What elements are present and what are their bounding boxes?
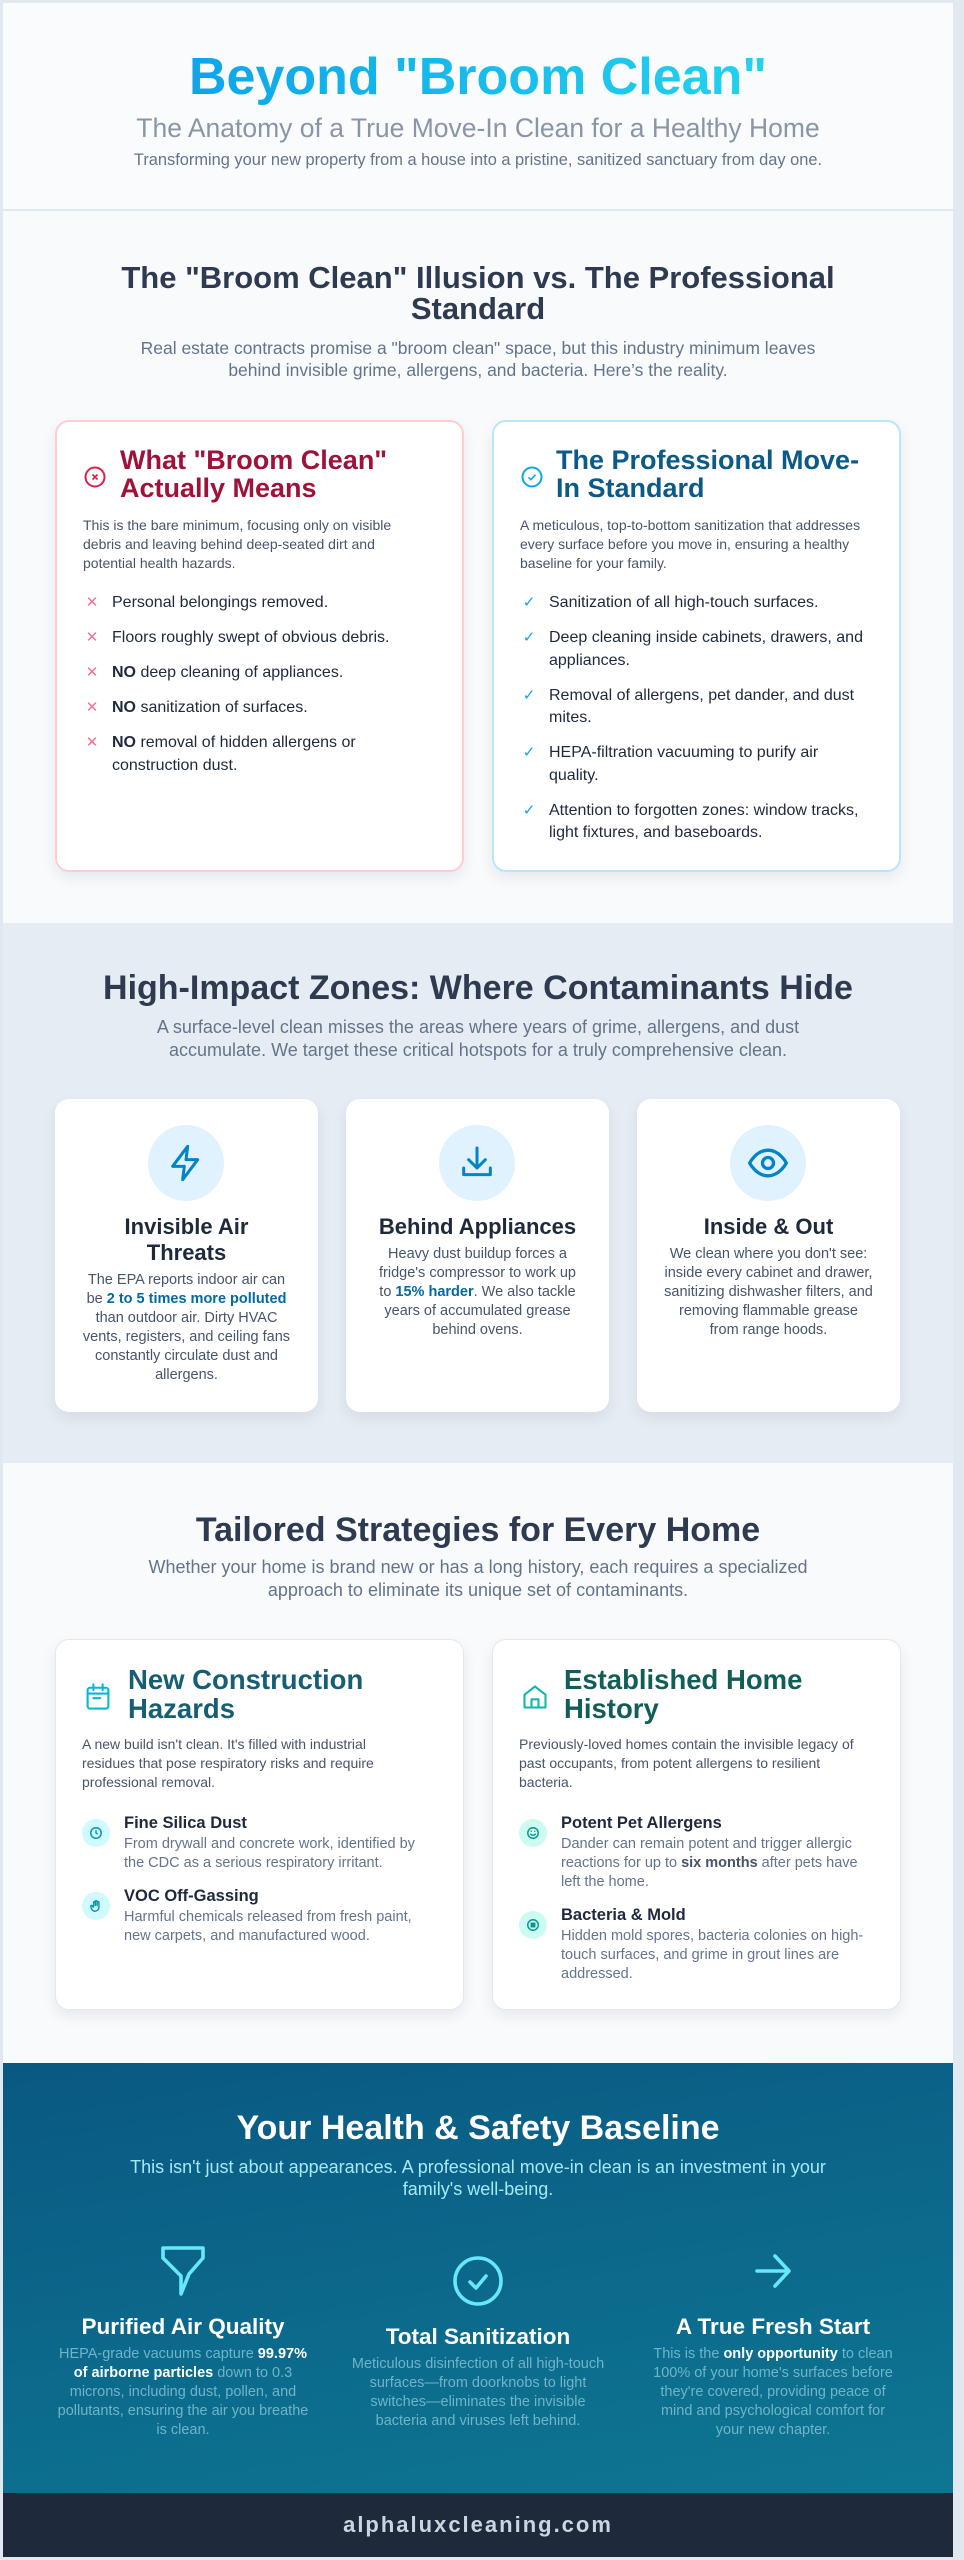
list: professional items: Removal of allergens, pet dander, and dust	[549, 686, 854, 704]
intro text: Whether your home is brand new or has a long history, each requires a specialized	[148, 1556, 808, 1576]
heading: High-Impact Zones: Where Contaminants Hide	[103, 969, 853, 1007]
item: silica dust: Fine Silica Dust	[124, 1814, 247, 1832]
icon: x circle	[84, 466, 106, 488]
list: professional items: Sanitization of all high-touch surfaces.	[549, 594, 818, 611]
footer	[3, 2493, 953, 2557]
list: professional items: appliances.	[549, 652, 630, 668]
intro text	[130, 2157, 826, 2199]
card title	[128, 1664, 363, 1724]
column: total sanitization	[352, 2256, 604, 2428]
card: invisible air threats: The EPA reports indoor air can	[88, 1272, 285, 1288]
list: broom clean items: NO sanitization of surfaces.	[112, 699, 308, 716]
card: inside & out	[637, 1099, 900, 1412]
footer url: alphaluxcleaning.com	[343, 2512, 613, 2537]
list: broom clean items: ✕	[86, 699, 98, 716]
card: invisible air threats: constantly circulate dust and	[95, 1348, 278, 1364]
card description: This is the bare minimum, focusing only on visible	[83, 517, 391, 533]
list: professional items: ✓	[523, 686, 535, 704]
card description	[519, 1736, 854, 1790]
card description: baseline for your family.	[520, 555, 667, 571]
column: fresh start: mind and psychological comfort for	[661, 2402, 885, 2418]
item: silica dust: the CDC as a serious respiratory irritant.	[124, 1854, 383, 1870]
item: VOC	[82, 1887, 412, 1944]
heading: Your Health & Safety Baseline	[236, 2109, 720, 2147]
column: total sanitization: bacteria and viruses left behind.	[376, 2412, 580, 2428]
list: broom clean items: NO removal of hidden allergens or	[112, 734, 356, 751]
card: invisible air threats: allergens.	[155, 1366, 218, 1382]
column: purified air: microns, including dust, pollen, and	[70, 2384, 296, 2400]
panel: new construction	[55, 1639, 464, 2010]
card title: In Standard	[556, 473, 705, 503]
card: invisible air threats: than outdoor air. Dirty HVAC	[96, 1310, 277, 1326]
item: VOC: Harmful chemicals released from fresh paint,	[124, 1908, 412, 1924]
list: professional items: ✓	[523, 744, 535, 761]
column: purified air: is clean.	[156, 2422, 210, 2438]
card: behind appliances: years of accumulated grease	[384, 1302, 571, 1318]
item: bacteria & mold	[519, 1906, 863, 1982]
card title: New Construction	[128, 1664, 363, 1695]
section: health & safety baseline	[3, 2063, 953, 2493]
column: total sanitization: surfaces—from doorknobs to light	[370, 2374, 586, 2390]
card description: past occupants, from potent allergens to resilient	[519, 1755, 820, 1771]
card title: Hazards	[128, 1693, 235, 1724]
heading	[121, 260, 835, 326]
card: inside & out: from range hoods.	[710, 1322, 827, 1338]
list: professional items: Attention to forgotten zones: window tracks,	[549, 802, 858, 818]
item: pet allergens: Potent Pet Allergens	[561, 1814, 722, 1832]
card description: professional removal.	[82, 1774, 215, 1790]
column: purified air: of airborne particles down to 0.3	[74, 2364, 292, 2380]
item: pet allergens: left the home.	[561, 1874, 649, 1890]
card: behind appliances: to 15% harder. We also tackle	[379, 1284, 576, 1300]
intro text: Real estate contracts promise a "broom clean" space, but this industry minimum leaves	[141, 338, 815, 358]
item: VOC: new carpets, and manufactured wood.	[124, 1928, 370, 1944]
item: bacteria & mold: Hidden mold spores, bacteria colonies on high-	[561, 1928, 863, 1944]
icon: calendar	[86, 1683, 110, 1710]
card title	[120, 445, 387, 503]
list: professional items: Deep cleaning inside cabinets, drawers, and	[549, 629, 863, 646]
card: invisible air threats: vents, registers, and ceiling fans	[83, 1328, 290, 1344]
card title	[556, 445, 859, 503]
list: broom clean items: Personal belongings removed.	[112, 594, 328, 611]
hazard list	[82, 1814, 415, 1944]
intro text: This isn't just about appearances. A professional move-in clean is an investment in your	[130, 2157, 826, 2177]
column: fresh start: they're covered, providing peace of	[660, 2384, 886, 2400]
card: inside & out: inside every cabinet and drawer,	[665, 1264, 872, 1280]
card title: What "Broom Clean"	[120, 445, 387, 475]
card description	[82, 1736, 374, 1790]
icon: filter	[161, 2246, 205, 2296]
list: professional items: ✓	[523, 629, 535, 646]
list: professional items: mites.	[549, 709, 592, 726]
card: inside & out: removing flammable grease	[679, 1302, 858, 1318]
card description: every surface before you move in, ensuring a healthy	[520, 536, 849, 552]
intro text: A surface-level clean misses the areas where years of grime, allergens, and dust	[157, 1016, 799, 1036]
card: behind appliances	[346, 1099, 609, 1412]
icon: check circle	[522, 466, 542, 488]
list: broom clean items: ✕	[86, 734, 98, 751]
intro text: behind invisible grime, allergens, and bacteria. Here’s the reality.	[228, 360, 728, 380]
card title: History	[564, 1693, 659, 1724]
card description: Previously-loved homes contain the invisible legacy of	[519, 1736, 854, 1752]
item: silica dust: From drywall and concrete work, identified by	[124, 1836, 415, 1852]
card title: The Professional Move-	[556, 445, 859, 475]
list: broom clean items: NO deep cleaning of appliances.	[112, 664, 343, 681]
icon: check circle	[453, 2256, 503, 2306]
intro text	[157, 1016, 799, 1060]
card: behind appliances: Heavy dust buildup forces a	[388, 1246, 567, 1262]
list: professional items: ✓	[523, 802, 535, 818]
column: fresh start	[653, 2254, 893, 2438]
intro text: accumulate. We target these critical hotspots for a truly comprehensive clean.	[169, 1040, 787, 1060]
card description: potential health hazards.	[83, 555, 236, 571]
column: total sanitization: Total Sanitization	[386, 2324, 570, 2349]
card: invisible air threats: be 2 to 5 times more polluted	[87, 1290, 286, 1306]
history list	[519, 1814, 863, 1982]
card title	[564, 1664, 802, 1724]
item: bacteria & mold: addressed.	[561, 1966, 633, 1982]
card description	[83, 517, 391, 571]
list: broom clean items: ✕	[86, 594, 98, 611]
item: pet allergens: reactions for up to six months after pets have	[561, 1854, 858, 1870]
icon: download	[439, 1125, 515, 1201]
column: purified air	[58, 2246, 308, 2438]
item: pet allergens	[519, 1814, 858, 1890]
card: behind appliances: behind ovens.	[432, 1322, 523, 1338]
card: behind appliances: fridge's compressor to work up	[379, 1264, 576, 1280]
card description	[520, 517, 860, 571]
panel: professional standard	[492, 420, 901, 872]
column: purified air: Purified Air Quality	[82, 2314, 284, 2339]
list: professional items: quality.	[549, 766, 599, 784]
column: total sanitization: switches—eliminates the invisible	[370, 2394, 586, 2410]
header	[3, 3, 953, 211]
card: inside & out: We clean where you don't see:	[670, 1246, 867, 1262]
column: fresh start: This is the only opportunity to clean	[653, 2346, 893, 2362]
list: broom clean items: ✕	[86, 664, 98, 681]
item: pet allergens: Dander can remain potent and trigger allergic	[561, 1836, 852, 1852]
intro text: family's well-being.	[403, 2179, 553, 2199]
column: purified air: pollutants, ensuring the air you breathe	[58, 2402, 308, 2418]
card title: Actually Means	[120, 473, 317, 503]
column: purified air: HEPA-grade vacuums capture 99.97%	[59, 2346, 307, 2362]
section: broom clean vs professional	[3, 211, 953, 923]
column: fresh start: 100% of your home's surfaces before	[653, 2364, 893, 2380]
panel: established home	[492, 1639, 901, 2010]
column: fresh start: A True Fresh Start	[676, 2314, 870, 2339]
card: invisible air threats: Invisible Air	[125, 1214, 248, 1239]
card: invisible air threats	[55, 1099, 318, 1412]
card description: A meticulous, top-to-bottom sanitization that addresses	[520, 517, 860, 533]
list: professional items: ✓	[523, 594, 535, 611]
card description: residues that pose respiratory risks and require	[82, 1755, 374, 1771]
icon: lightning	[148, 1125, 224, 1201]
item: bacteria & mold: Bacteria & Mold	[561, 1906, 686, 1924]
icon: eye	[730, 1125, 806, 1201]
item: bacteria & mold: touch surfaces, and grime in grout lines are	[561, 1946, 839, 1962]
card: inside & out: sanitizing dishwasher filters, and	[664, 1284, 873, 1300]
tagline: Transforming your new property from a house into a pristine, sanitized sanctuary from day one.	[134, 151, 822, 169]
icon: house	[523, 1685, 547, 1708]
item: VOC: VOC Off-Gassing	[124, 1887, 259, 1905]
intro text	[148, 1556, 808, 1600]
heading: Standard	[411, 291, 545, 326]
card description: bacteria.	[519, 1774, 573, 1790]
item: silica dust	[82, 1814, 415, 1870]
card: inside & out: Inside & Out	[704, 1214, 833, 1239]
intro text: approach to eliminate its unique set of contaminants.	[268, 1580, 688, 1600]
heading: Tailored Strategies for Every Home	[196, 1511, 760, 1549]
card description: debris and leaving behind deep-seated dirt and	[83, 536, 375, 552]
heading: The "Broom Clean" Illusion vs. The Professional	[121, 260, 835, 295]
section: high-impact zones	[3, 923, 953, 1463]
column: fresh start: your new chapter.	[716, 2422, 830, 2438]
list: broom clean items: ✕	[86, 629, 98, 646]
list: broom clean items: Floors roughly swept of obvious debris.	[112, 629, 389, 646]
list: professional items	[523, 594, 863, 841]
list: professional items: light fixtures, and baseboards.	[549, 824, 762, 841]
title: Beyond "Broom Clean"	[189, 48, 767, 106]
list: broom clean items	[86, 594, 389, 774]
icon: arrow	[755, 2254, 791, 2288]
card: behind appliances: Behind Appliances	[379, 1214, 576, 1239]
card description: A new build isn't clean. It's filled with industrial	[82, 1736, 366, 1752]
list: professional items: HEPA-filtration vacuuming to purify air	[549, 744, 818, 761]
intro text	[141, 338, 815, 380]
section: tailored strategies	[3, 1463, 953, 2063]
card: invisible air threats: Threats	[147, 1240, 226, 1265]
subtitle: The Anatomy of a True Move-In Clean for a Healthy Home	[136, 113, 820, 143]
card title: Established Home	[564, 1664, 802, 1695]
list: broom clean items: construction dust.	[112, 756, 237, 774]
column: total sanitization: Meticulous disinfection of all high-touch	[352, 2356, 604, 2372]
panel: broom clean	[55, 420, 464, 872]
